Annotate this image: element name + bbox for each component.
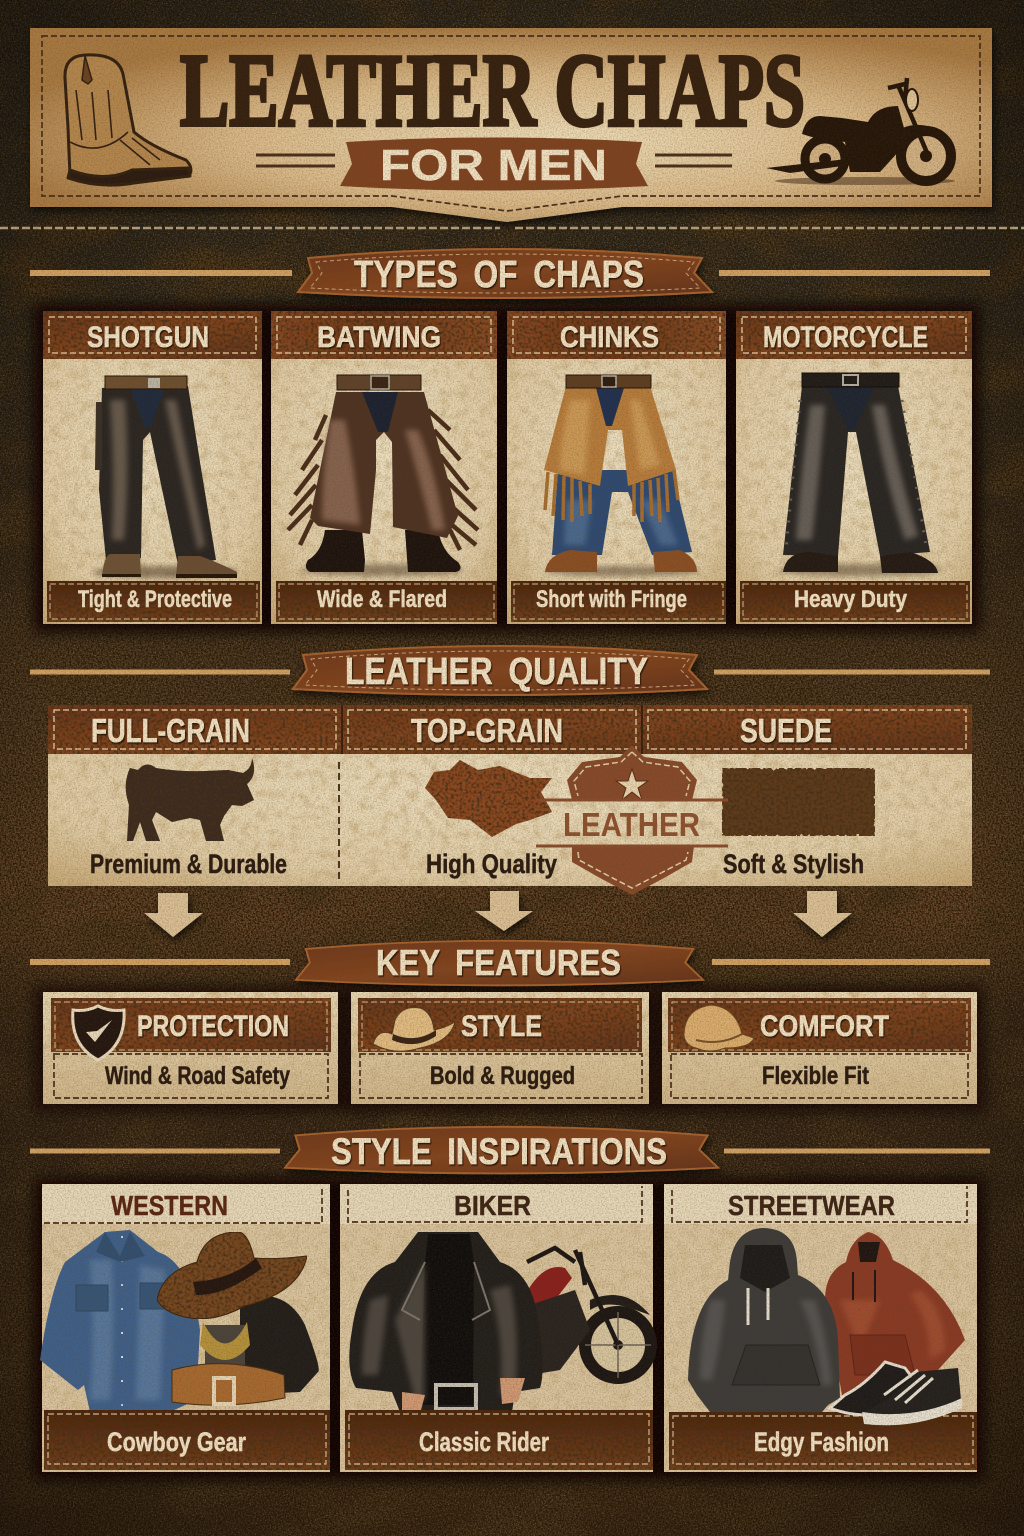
panel: batwing card	[271, 311, 497, 624]
card footer	[740, 581, 970, 622]
card header	[271, 311, 497, 359]
card header	[736, 311, 972, 359]
feature header	[358, 998, 642, 1052]
card header: BATWING	[317, 321, 441, 354]
card heading	[340, 1184, 653, 1224]
card footer	[511, 581, 726, 622]
card header: CHINKS	[560, 321, 659, 354]
card header	[43, 311, 262, 359]
illustration: chinks with fringe	[544, 375, 700, 576]
card footer	[669, 1412, 977, 1470]
feature header	[51, 998, 331, 1052]
quality header strip: TOP-GRAIN	[411, 712, 563, 749]
illustration: red hoodie	[825, 1232, 965, 1400]
icon: motorcycle	[766, 78, 955, 185]
icon: bull silhouette	[126, 758, 254, 841]
icon: shield	[73, 1006, 124, 1060]
panel: protection	[43, 992, 338, 1104]
decorative lines left of subtitle	[256, 155, 732, 166]
caption: high quality: High Quality	[426, 849, 557, 879]
card header	[507, 311, 726, 359]
caption: premium and durable: Premium & Durable	[90, 849, 287, 879]
icon: top-grain leather hide	[425, 760, 552, 837]
badge: leather	[536, 745, 728, 895]
card heading: WESTERN	[111, 1190, 228, 1221]
panel: leather quality	[48, 705, 972, 895]
subtitle ribbon: FOR MEN	[380, 141, 607, 190]
card footer: Heavy Duty	[794, 586, 908, 613]
illustration: motorcycle chaps	[778, 373, 942, 576]
illustration: denim, hat, belt, jacket	[40, 1230, 319, 1412]
header banner	[30, 28, 992, 222]
panel: style	[351, 992, 649, 1104]
quality header strip: SUEDE	[740, 712, 832, 749]
section heading: leather quality	[30, 646, 990, 695]
caption: Flexible Fit	[762, 1062, 870, 1090]
feature header: COMFORT	[760, 1010, 889, 1043]
caption: soft and stylish: Soft & Stylish	[723, 849, 864, 879]
section heading: types of chaps	[30, 249, 990, 298]
card heading: STREETWEAR	[728, 1190, 895, 1221]
section heading: types of chaps: TYPES OF CHAPS	[354, 254, 644, 296]
stitched divider	[0, 227, 1024, 229]
panel: biker	[340, 1184, 653, 1472]
section heading: style inspirations	[30, 1127, 990, 1173]
icon: cowboy hat	[373, 1008, 455, 1051]
illustration: grey hoodie	[688, 1228, 840, 1412]
panel: streetwear	[664, 1184, 977, 1472]
icon: cowboy boot	[65, 55, 191, 185]
section heading: key features: KEY FEATURES	[376, 942, 621, 983]
panel: motorcycle card	[736, 311, 972, 624]
card footer: Cowboy Gear	[107, 1427, 246, 1457]
card footer: Tight & Protective	[78, 586, 232, 613]
card footer	[276, 581, 497, 622]
feature header	[668, 998, 971, 1052]
subtitle ribbon	[340, 138, 648, 190]
icon: flat cap	[684, 1005, 754, 1051]
section heading: style inspirations: STYLE INSPIRATIONS	[331, 1131, 667, 1172]
illustration: sneakers	[830, 1362, 962, 1425]
illustration: leather jacket	[349, 1232, 543, 1414]
card footer: Wide & Flared	[317, 586, 447, 613]
card footer: Edgy Fashion	[754, 1427, 889, 1457]
card heading	[42, 1184, 330, 1224]
badge: leather: LEATHER	[563, 806, 700, 843]
card footer	[44, 1410, 330, 1470]
section heading: leather quality: LEATHER QUALITY	[345, 651, 648, 693]
card header: MOTORCYCLE	[763, 321, 928, 354]
feature header: STYLE	[461, 1010, 542, 1043]
panel: shotgun card	[43, 311, 262, 624]
card footer: Short with Fringe	[536, 586, 687, 613]
card footer	[47, 581, 260, 622]
illustration: motorcycle behind	[527, 1248, 651, 1378]
feature header: PROTECTION	[137, 1010, 289, 1043]
section heading: key features	[30, 941, 990, 985]
quality header strip: FULL-GRAIN	[91, 712, 250, 749]
card heading	[664, 1184, 977, 1224]
caption: Wind & Road Safety	[105, 1062, 290, 1090]
illustration: shotgun chaps	[93, 376, 237, 578]
panel: comfort	[662, 992, 977, 1104]
card heading: BIKER	[454, 1190, 531, 1221]
panel: chinks card	[507, 311, 726, 624]
illustration: batwing chaps	[288, 375, 478, 576]
quality header strip	[48, 705, 972, 754]
card header: SHOTGUN	[87, 321, 209, 354]
card footer	[345, 1410, 653, 1470]
card footer: Classic Rider	[419, 1427, 549, 1457]
panel: western	[40, 1184, 330, 1472]
arrows	[144, 891, 852, 937]
icon: suede swatch	[722, 768, 875, 836]
caption: Bold & Rugged	[430, 1062, 575, 1090]
